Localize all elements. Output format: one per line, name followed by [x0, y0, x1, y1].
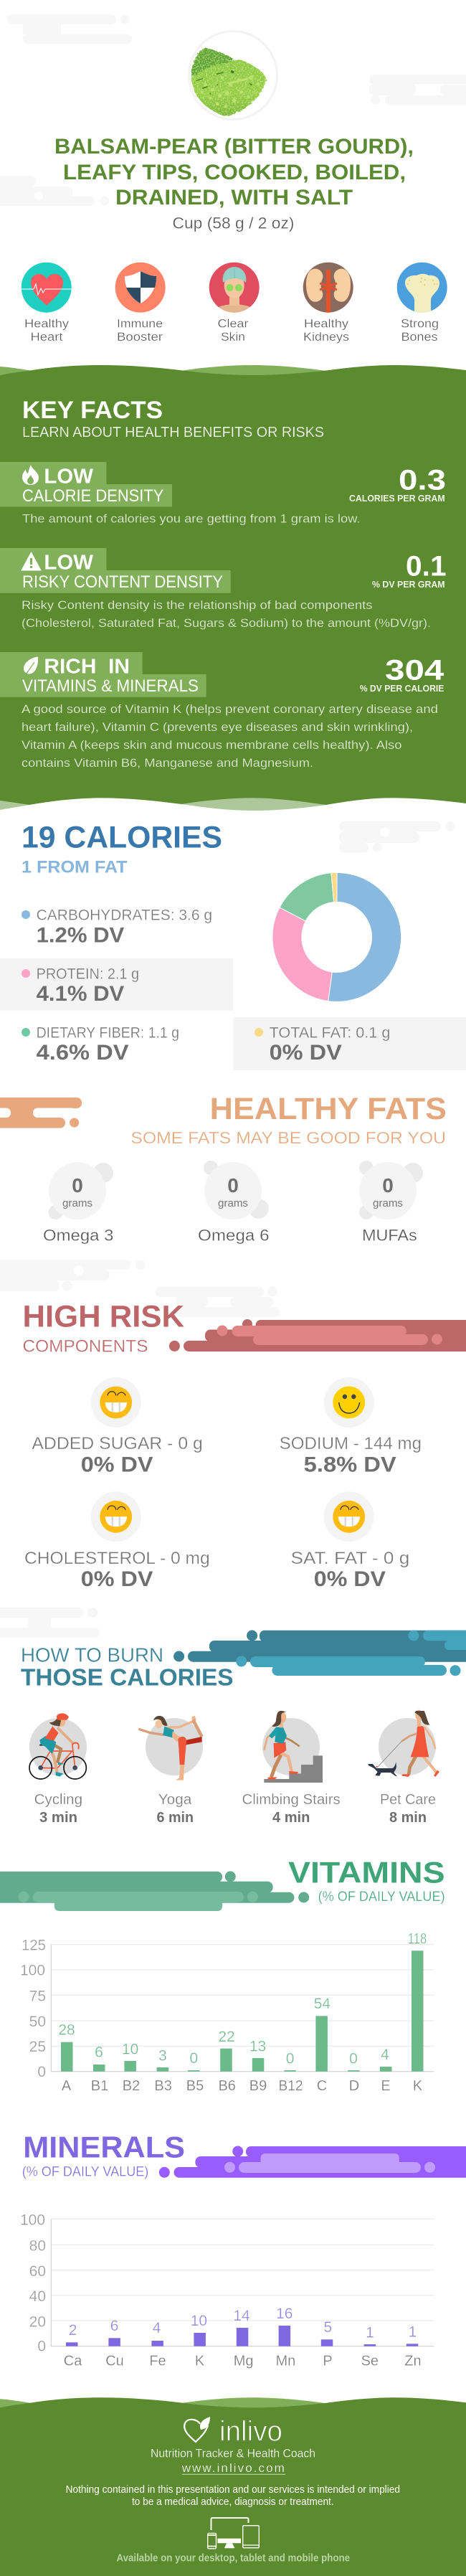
bar chart: minerals: Ca — [64, 2353, 82, 2369]
nutrient: carbohydrates — [22, 907, 212, 948]
bar chart: vitamins: 125 — [22, 1937, 46, 1953]
benefit labels: Clear — [218, 316, 249, 330]
panel: high risk components — [0, 1260, 466, 1591]
nutrient: carbohydrates: CARBOHYDRATES: 3.6 g — [37, 907, 212, 924]
fact: rich in vitamins and minerals: 304 — [385, 655, 444, 687]
panel: calories — [0, 820, 466, 1070]
risk: saturated fat — [291, 1491, 409, 1591]
bar chart: minerals: 2 — [69, 2322, 77, 2339]
nutrient: total fat: 0% DV — [270, 1041, 342, 1065]
fact: rich in vitamins and minerals — [0, 652, 444, 770]
fact: calorie density: LOW — [44, 466, 94, 489]
icon: strong bones — [397, 263, 447, 316]
benefit labels: Heart — [30, 330, 63, 344]
bar chart: minerals: Se — [361, 2353, 379, 2369]
fat: omega 6: grams — [218, 1198, 248, 1209]
fact: calorie density: The amount of calories you are getting from 1 gram is low. — [22, 512, 361, 526]
activity labels: Yoga — [158, 1792, 192, 1808]
background clouds: top — [0, 14, 466, 207]
logo: inlivo — [184, 2416, 282, 2448]
panel: vitamins — [0, 1855, 445, 2094]
benefit labels: Healthy — [304, 316, 349, 330]
nutrient: total fat — [234, 1017, 466, 1070]
fact: calorie density: CALORIES PER GRAM — [349, 493, 445, 504]
availability note: Available on your desktop, tablet and mobile phone — [116, 2553, 350, 2565]
bar chart: minerals: 40 — [29, 2288, 46, 2305]
food photo — [189, 32, 277, 119]
panel: healthy fats: SOME FATS MAY BE GOOD FOR YOU — [130, 1128, 446, 1147]
fact: calorie density — [0, 462, 446, 526]
bar chart: minerals: Cu — [105, 2353, 124, 2369]
bar chart: vitamins: 25 — [29, 2039, 46, 2055]
benefits row — [22, 263, 447, 344]
activity labels: 4 min — [272, 1810, 310, 1826]
icon: grinning face — [100, 1387, 132, 1418]
benefit labels: Booster — [117, 330, 163, 344]
panel: high risk components: COMPONENTS — [23, 1337, 148, 1357]
bar chart: vitamins: K — [413, 2078, 423, 2094]
bar chart: vitamins: 0 — [37, 2064, 46, 2080]
fat: omega 6 — [198, 1161, 270, 1244]
panel: how to burn those calories — [0, 1608, 466, 1826]
bar chart: minerals: 100 — [20, 2212, 45, 2228]
heading: high risk: HIGH RISK — [23, 1299, 184, 1334]
nutrient: dietary fiber — [22, 1024, 179, 1065]
bar chart: minerals: Zn — [404, 2353, 422, 2369]
benefit labels: Kidneys — [303, 330, 349, 344]
activity labels: Pet Care — [380, 1792, 436, 1808]
tagline: Nutrition Tracker & Health Coach — [151, 2447, 315, 2461]
bar chart: vitamins: 54 — [314, 1996, 331, 2012]
heading: healthy fats: HEALTHY FATS — [210, 1092, 447, 1126]
bar chart: vitamins: A — [62, 2078, 72, 2094]
fat: omega 6: Omega 6 — [198, 1227, 270, 1244]
fat: MUFAs: grams — [373, 1198, 403, 1209]
icon: flame — [22, 465, 39, 485]
heading: key facts: LEARN ABOUT HEALTH BENEFITS OR RISKS — [22, 425, 324, 440]
decorative banner — [159, 2146, 466, 2178]
bar chart: minerals: 6 — [110, 2318, 118, 2334]
nutrient: carbohydrates: 1.2% DV — [37, 924, 124, 948]
heading: vitamins: VITAMINS — [288, 1855, 445, 1889]
fat: omega 3 — [43, 1162, 113, 1244]
panel: how to burn those calories: THOSE CALORIES — [21, 1664, 234, 1690]
bar chart: vitamins: 10 — [122, 2041, 138, 2057]
benefit labels: Strong — [401, 316, 439, 330]
donut chart — [272, 872, 401, 1001]
fact: rich in vitamins and minerals: A good source of Vitamin K (helps prevent coronary artery disease and — [22, 702, 438, 716]
benefit labels: Bones — [401, 330, 437, 344]
fat: MUFAs — [359, 1161, 423, 1244]
title: DRAINED, WITH SALT — [115, 186, 353, 209]
bar chart: vitamins: 13 — [249, 2038, 266, 2054]
decorative banner — [0, 1098, 82, 1128]
fact: rich in vitamins and minerals: VITAMINS & MINERALS — [22, 676, 199, 696]
bar chart: vitamins: 75 — [29, 1988, 46, 2004]
benefit labels: Healthy — [24, 316, 70, 330]
activity: cycling — [29, 1713, 87, 1779]
bar chart: minerals: 1 — [366, 2324, 374, 2341]
decorative banner — [0, 1871, 309, 1911]
decorative banner — [173, 1630, 466, 1676]
risk: sodium: 5.8% DV — [304, 1453, 396, 1476]
fact: risky content density: LOW — [44, 551, 94, 574]
fat: omega 3: 0 — [72, 1174, 83, 1197]
bar chart: vitamins: B9 — [249, 2078, 267, 2094]
panel: minerals: (% OF DAILY VALUE) — [22, 2164, 148, 2179]
icon: warning triangle — [22, 552, 41, 570]
risk: saturated fat: SAT. FAT - 0 g — [291, 1549, 409, 1568]
risk: added sugar — [32, 1377, 203, 1476]
fact: risky content density: RISKY CONTENT DENSITY — [22, 572, 223, 592]
decorative banner — [169, 1319, 466, 1351]
bar chart: minerals — [20, 2212, 434, 2369]
bar chart: minerals: 60 — [29, 2263, 46, 2280]
bar chart: minerals: K — [195, 2353, 205, 2369]
bar chart: minerals: 14 — [233, 2308, 250, 2324]
fact: rich in vitamins and minerals: contains Vitamin B6, Manganese and Magnesium. — [22, 756, 313, 770]
bar chart: minerals: 5 — [323, 2319, 332, 2336]
bar chart: vitamins: 0 — [189, 2050, 198, 2067]
fact: risky content density: (Cholesterol, Saturated Fat, Sugars & Sodium) to the amount (%DV/gr). — [22, 616, 431, 630]
activity labels: Climbing Stairs — [242, 1792, 341, 1808]
bar chart: minerals: 10 — [191, 2313, 207, 2329]
disclaimer — [66, 2484, 400, 2508]
activity labels: Cycling — [34, 1792, 82, 1808]
bar chart: minerals: 16 — [276, 2306, 293, 2322]
nutrient: dietary fiber: DIETARY FIBER: 1.1 g — [37, 1024, 179, 1041]
bar chart: vitamins: 0 — [286, 2051, 294, 2067]
heading: key facts: KEY FACTS — [22, 397, 163, 424]
fact: calorie density: CALORIE DENSITY — [22, 486, 163, 506]
bar chart: vitamins: 6 — [95, 2044, 103, 2061]
bar chart: minerals: 20 — [29, 2313, 46, 2330]
panel: minerals — [20, 2130, 466, 2369]
activity: climbing stairs — [262, 1711, 323, 1783]
bar chart: vitamins: B5 — [186, 2078, 204, 2094]
icon: immune booster — [115, 263, 166, 313]
fat: omega 6: 0 — [227, 1174, 239, 1197]
bar chart: vitamins — [20, 1930, 434, 2094]
website link: www.inlivo.com — [181, 2461, 285, 2475]
fact: rich in vitamins and minerals: % DV PER CALORIE — [360, 683, 444, 694]
bar chart: vitamins: 22 — [218, 2029, 235, 2045]
benefit labels — [24, 316, 439, 344]
bar chart: vitamins: E — [381, 2078, 391, 2094]
risk: sodium: SODIUM - 144 mg — [280, 1434, 422, 1453]
bar chart: vitamins: 118 — [408, 1930, 427, 1947]
activity labels — [34, 1792, 436, 1826]
bar chart: minerals: Mn — [276, 2353, 295, 2369]
background clouds — [0, 1260, 280, 1317]
nutrient: total fat: TOTAL FAT: 0.1 g — [270, 1024, 390, 1041]
logo: inlivo: inlivo — [219, 2416, 282, 2448]
nutrient: protein: PROTEIN: 2.1 g — [37, 966, 139, 982]
fact: rich in vitamins and minerals: heart failure), Vitamin C (prevents eye diseases and skin wrinkling), — [22, 720, 413, 734]
heading: how to burn: HOW TO BURN — [21, 1644, 163, 1666]
risk: cholesterol: 0% DV — [81, 1567, 153, 1591]
bar chart: minerals: Mg — [234, 2353, 253, 2369]
panel: vitamins: (% OF DAILY VALUE) — [318, 1889, 445, 1905]
activity labels: 3 min — [39, 1810, 77, 1826]
risk: sodium — [280, 1377, 422, 1476]
disclaimer: Nothing contained in this presentation and our services is intended or implied — [66, 2484, 400, 2496]
icon: smiling face — [333, 1387, 365, 1418]
heading: key facts — [22, 397, 324, 440]
icon: leaf — [24, 657, 38, 674]
fat: omega 3: grams — [62, 1198, 92, 1209]
title: BALSAM-PEAR (BITTER GOURD), — [54, 135, 414, 159]
icon: healthy kidneys — [303, 263, 353, 313]
bar chart: vitamins: 28 — [58, 2022, 75, 2039]
fact: risky content density: % DV PER GRAM — [372, 579, 445, 590]
panel: healthy fats — [0, 1092, 447, 1244]
bar chart: vitamins: C — [317, 2078, 327, 2094]
risk: added sugar: 0% DV — [81, 1453, 153, 1476]
bar chart: vitamins: 0 — [349, 2051, 358, 2067]
title — [54, 135, 414, 209]
bar chart: vitamins: B6 — [218, 2078, 236, 2094]
fact: risky content density: 0.1 — [406, 551, 447, 582]
fact: risky content density: Risky Content density is the relationship of bad components — [22, 598, 373, 612]
fat: MUFAs: 0 — [382, 1174, 394, 1197]
fact: calorie density: 0.3 — [399, 464, 446, 496]
fact: rich in vitamins and minerals: RICH IN — [44, 655, 130, 678]
bar chart: minerals: 1 — [409, 2323, 417, 2340]
panel: calories: 1 FROM FAT — [22, 857, 128, 877]
icon: grinning face — [333, 1501, 365, 1533]
activity: yoga — [138, 1716, 203, 1780]
background cloud — [339, 821, 455, 852]
heading: calories: 19 CALORIES — [22, 820, 222, 854]
bar chart: vitamins: B1 — [91, 2078, 108, 2094]
bar chart: minerals: P — [323, 2353, 333, 2369]
benefit labels: Skin — [221, 330, 245, 344]
bar chart: minerals: 80 — [29, 2237, 46, 2254]
disclaimer: to be a medical advice, diagnosis or treatment. — [132, 2496, 334, 2508]
benefit labels: Immune — [117, 316, 163, 330]
risk: cholesterol — [24, 1491, 210, 1591]
bar chart: vitamins: B3 — [154, 2078, 172, 2094]
nutrient: protein — [0, 958, 234, 1011]
bar chart: vitamins: B12 — [278, 2078, 303, 2094]
bar chart: minerals: Fe — [149, 2353, 166, 2369]
nutrient: protein: 4.1% DV — [37, 982, 124, 1006]
bar chart: vitamins: 100 — [20, 1962, 45, 1978]
icon: devices — [208, 2518, 259, 2549]
risk: cholesterol: CHOLESTEROL - 0 mg — [24, 1549, 210, 1568]
bar chart: vitamins: 3 — [158, 2047, 167, 2064]
panel: key facts — [0, 365, 466, 818]
serving size: Cup (58 g / 2 oz) — [172, 214, 294, 232]
activity: pet care — [368, 1710, 439, 1777]
risk: saturated fat: 0% DV — [314, 1567, 386, 1591]
heading: minerals: MINERALS — [23, 2130, 185, 2164]
background cloud — [0, 1608, 100, 1638]
icon: healthy heart — [22, 263, 72, 313]
risk: added sugar: ADDED SUGAR - 0 g — [32, 1434, 203, 1453]
bar chart: minerals: 4 — [153, 2320, 161, 2336]
panel background with waves — [0, 365, 466, 818]
activity labels: 6 min — [156, 1810, 194, 1826]
title: LEAFY TIPS, COOKED, BOILED, — [63, 161, 406, 184]
fat: omega 3: Omega 3 — [43, 1227, 113, 1244]
icon: grinning face — [100, 1501, 132, 1533]
bar chart: minerals: 0 — [37, 2338, 46, 2354]
bar chart: vitamins: D — [349, 2078, 359, 2094]
bar chart: vitamins: B2 — [123, 2078, 140, 2094]
bar chart: vitamins: 50 — [29, 2014, 46, 2030]
fat: MUFAs: MUFAs — [362, 1227, 417, 1244]
nutrient: dietary fiber: 4.6% DV — [37, 1041, 128, 1065]
bar chart: vitamins: 4 — [381, 2047, 389, 2063]
fact: rich in vitamins and minerals: Vitamin A (keeps skin and mucous membrane cells healthy). Also — [22, 738, 401, 752]
panel: footer — [0, 2397, 466, 2576]
icon: clear skin — [209, 263, 260, 313]
footer background with waves — [0, 2397, 466, 2576]
fact: risky content density — [0, 548, 447, 630]
activity labels: 8 min — [389, 1810, 427, 1826]
